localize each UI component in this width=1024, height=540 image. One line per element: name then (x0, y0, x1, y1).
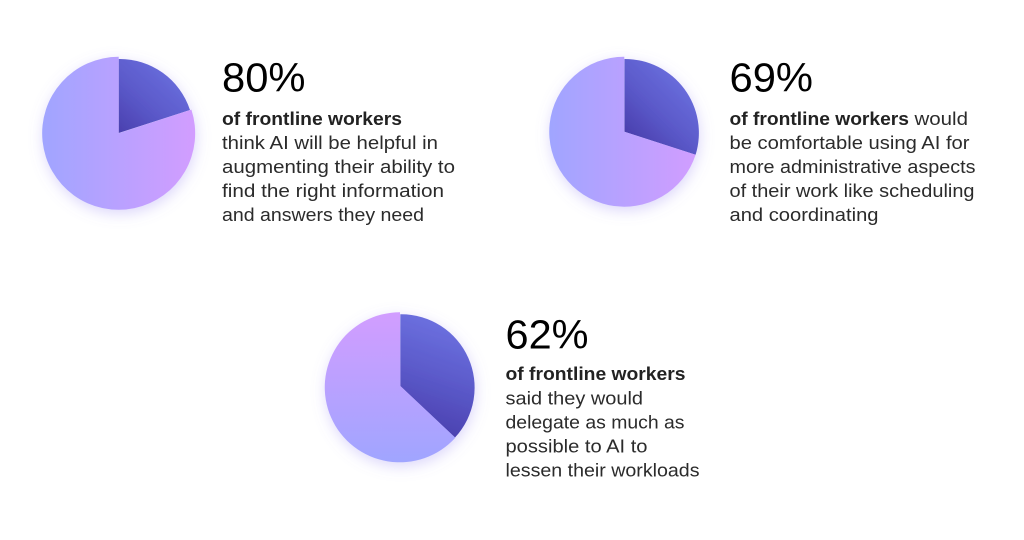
text block: 62% description: possible to AI to (506, 436, 648, 457)
text block: 80% description: find the right information (222, 180, 444, 201)
text block: 62% description: of frontline workers (506, 363, 686, 384)
text block: 80% description: and answers they need (222, 204, 424, 225)
text block: 62% description: said they would (506, 387, 643, 408)
text block: 62% description (506, 363, 700, 481)
stat number: 62%: 62% (506, 311, 588, 357)
text block: 69% description: be comfortable using AI for (730, 132, 970, 153)
panel: 62% statistic (325, 311, 700, 481)
text block: 69% description (730, 108, 976, 225)
text block: 80% description: of frontline workers (222, 108, 402, 129)
stat number: 80%: 80% (222, 55, 306, 101)
pie chart: 62% (325, 312, 475, 462)
text block: 80% description: augmenting their ability to (222, 156, 455, 177)
panel: 69% statistic (549, 55, 976, 225)
pie chart: 80% (42, 57, 195, 210)
text block: 69% description: more administrative aspects (730, 156, 976, 177)
stat number: 69%: 69% (730, 55, 813, 101)
panel: 80% statistic (42, 55, 455, 225)
text block: 80% description: think AI will be helpful in (222, 132, 438, 153)
text block: 69% description: of frontline workers (730, 108, 909, 129)
text block: 69% description: of their work like scheduling (730, 180, 974, 201)
text block: 62% description: delegate as much as (506, 412, 684, 432)
text block: 69% description: would (913, 108, 968, 129)
text block: 80% description (222, 108, 455, 225)
text block: 69% description: and coordinating (730, 204, 878, 225)
text block: 62% description: lessen their workloads (506, 460, 700, 481)
pie chart: 69% (549, 57, 699, 207)
